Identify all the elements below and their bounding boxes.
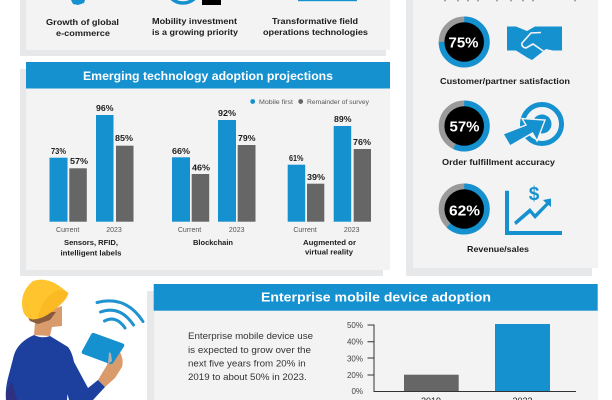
- bar chart: blockchain: 2023: [229, 227, 245, 234]
- donut: 75%: 75%: [448, 34, 478, 52]
- thumb: [108, 352, 112, 364]
- text: transformative field operations: [263, 16, 368, 37]
- bar chart: sensors, RFID, intelligent labels: 96%: [96, 104, 114, 113]
- icon: revenue growth chart: $: [529, 184, 540, 205]
- icon: field technology fragment: [298, 0, 357, 1]
- heading bar: [26, 62, 390, 88]
- bar chart: blockchain: Blockchain: [193, 238, 233, 247]
- heading bar: Enterprise mobile device adoption: [261, 290, 491, 304]
- bar chart: adoption 2019 vs 2023: [347, 321, 576, 400]
- icon: wifi arcs: [97, 301, 143, 328]
- icon: revenue growth chart: [505, 184, 562, 235]
- bar chart: augmented or virtual reality: 39%: [307, 173, 325, 182]
- heading bar: Emerging technology adoption projections: [83, 69, 333, 83]
- text block: [188, 331, 313, 382]
- label: order fulfillment accuracy: Order fulfillment accuracy: [442, 157, 555, 167]
- bar chart: augmented or virtual reality: virtual reality: [305, 248, 354, 257]
- bar chart: sensors, RFID, intelligent labels: Sensors, RFID,: [64, 238, 118, 247]
- donut: 57%: 57%: [450, 118, 480, 136]
- text: growth of global e-commerce: [46, 17, 119, 38]
- bar chart: augmented or virtual reality: Augmented or: [303, 238, 356, 247]
- bar chart: adoption 2019 vs 2023: 20%: [347, 371, 363, 380]
- torso: [6, 335, 105, 400]
- bar chart: blockchain: 79%: [238, 134, 256, 143]
- icon: globe fragment: [71, 0, 85, 5]
- illustration: worker with hard hat and tablet: [6, 280, 143, 400]
- hard hat: [22, 280, 68, 320]
- bar chart: blockchain: Current: [178, 227, 201, 234]
- bar chart: augmented or virtual reality: 89%: [334, 115, 352, 124]
- text: growth of global e-commerce: e-commerce: [56, 28, 110, 38]
- text: mobility investment: Mobility investment: [152, 16, 237, 26]
- hair: [25, 312, 56, 324]
- bar chart: sensors, RFID, intelligent labels: 85%: [115, 134, 133, 143]
- bar chart: blockchain: 46%: [192, 164, 210, 172]
- text block: is expected to grow over the: [188, 345, 311, 355]
- legend: Remainder of survey: [307, 100, 369, 106]
- donut: 57%: [442, 104, 487, 148]
- legend: [250, 99, 369, 106]
- icon: target with arrow: [503, 104, 562, 146]
- bar chart: adoption 2019 vs 2023: 50%: [347, 321, 363, 330]
- bar chart: sensors, RFID, intelligent labels: Current: [56, 227, 79, 234]
- bar chart: sensors, RFID, intelligent labels: 73%: [51, 147, 66, 156]
- text block: Enterprise mobile device use: [188, 331, 313, 341]
- heading bar: [154, 284, 598, 311]
- bar chart: augmented or virtual reality: 2023: [344, 227, 360, 234]
- panel: business benefits: [406, 0, 598, 276]
- neck and head: [34, 306, 62, 336]
- donut: 75%: [442, 20, 487, 64]
- bar chart: blockchain: 66%: [172, 147, 190, 156]
- icon: handshake: [507, 26, 562, 60]
- icon: mobility circle fragment: [166, 0, 221, 5]
- bar chart: augmented or virtual reality: [288, 115, 371, 257]
- bar chart: augmented or virtual reality: 61%: [289, 154, 304, 163]
- bar chart: sensors, RFID, intelligent labels: [50, 104, 134, 258]
- label: customer/partner satisfaction: Customer/partner satisfaction: [440, 76, 570, 86]
- bar chart: augmented or virtual reality: Current: [293, 227, 317, 234]
- bar chart: sensors, RFID, intelligent labels: 2023: [106, 227, 122, 234]
- bar chart: sensors, RFID, intelligent labels: 57%: [70, 157, 88, 166]
- panel: enterprise mobile device adoption: [147, 284, 598, 400]
- bar chart: sensors, RFID, intelligent labels: intelligent labels: [60, 248, 122, 258]
- donut: 62%: [442, 186, 487, 232]
- label: revenue/sales: Revenue/sales: [467, 244, 529, 254]
- tablet: [82, 333, 124, 364]
- text block: 2019 to about 50% in 2023.: [188, 372, 307, 382]
- text block: next five years from 20% in: [188, 358, 306, 368]
- text: transformative field operations: Transformative field: [272, 16, 358, 26]
- bar chart: blockchain: 92%: [218, 109, 236, 118]
- bar chart: adoption 2019 vs 2023: 40%: [347, 338, 363, 347]
- bar chart: adoption 2019 vs 2023: 30%: [347, 354, 363, 364]
- text: growth of global e-commerce: Growth of global: [46, 17, 119, 27]
- legend: Mobile first: [259, 100, 293, 106]
- panel: emerging technology adoption projections: [20, 62, 390, 276]
- arm skin: [98, 352, 123, 387]
- text: mobility investment: is a growing priority: [152, 27, 238, 37]
- panel: top drivers: [20, 0, 390, 56]
- donut: 62%: 62%: [449, 202, 480, 220]
- text: transformative field operations: operations technologies: [263, 27, 368, 37]
- bar chart: adoption 2019 vs 2023: 0%: [351, 387, 363, 396]
- bar chart: augmented or virtual reality: 76%: [353, 138, 371, 147]
- text: mobility investment: [152, 16, 238, 37]
- bar chart: blockchain: [172, 109, 256, 247]
